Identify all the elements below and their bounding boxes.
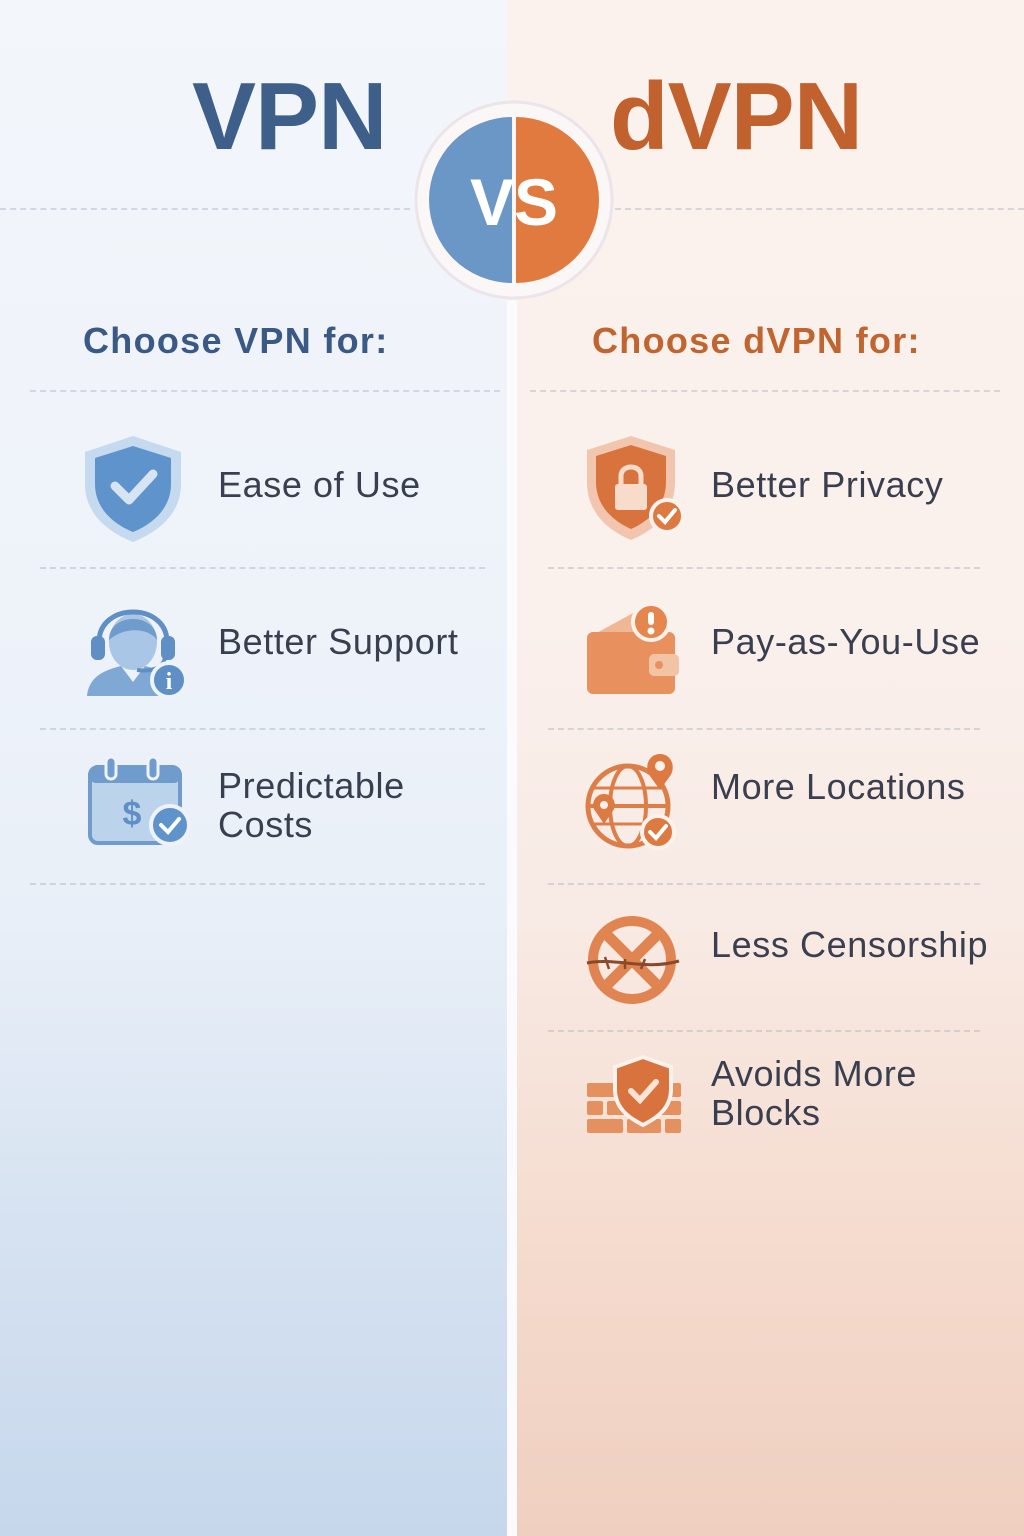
icon: wall shield (587, 1055, 681, 1133)
text: Less Censorship: Less Censorship (711, 924, 988, 965)
icon: calendar dollar: $ (123, 795, 142, 833)
text: More Locations: More Locations (711, 766, 966, 807)
heading: Choose VPN for: Choose VPN for: (83, 320, 389, 361)
text: Avoids More Blocks: Blocks (711, 1092, 821, 1133)
icon: wallet (587, 606, 679, 694)
title: VPN: VPN (192, 63, 386, 170)
icon: support agent (87, 610, 184, 696)
VS badge: VS (470, 165, 558, 239)
text: Avoids More Blocks: Avoids More (711, 1053, 917, 1094)
icon: no censorship (586, 916, 680, 1004)
title: dVPN: dVPN (610, 63, 862, 170)
text: Better Support: Better Support (218, 621, 459, 662)
VS badge (414, 100, 614, 300)
text: Predictable Costs (218, 765, 405, 845)
heading: Choose dVPN for: Choose dVPN for: (592, 320, 921, 361)
icon: shield check (85, 436, 181, 542)
icon: shield lock (587, 436, 681, 540)
text: Predictable Costs: Costs (218, 804, 313, 845)
background: left panel (0, 0, 507, 1536)
text: Ease of Use: Ease of Use (218, 464, 421, 505)
text: Avoids More Blocks (711, 1053, 917, 1133)
icon: globe pins (586, 754, 673, 848)
background: right panel (507, 0, 1024, 1536)
icon: calendar dollar (88, 758, 187, 845)
text: Better Privacy: Better Privacy (711, 464, 943, 505)
divider (507, 300, 517, 1536)
text: Predictable Costs: Predictable (218, 765, 405, 806)
text: Pay-as-You-Use: Pay-as-You-Use (711, 621, 980, 662)
icon: support agent: i (166, 669, 173, 695)
